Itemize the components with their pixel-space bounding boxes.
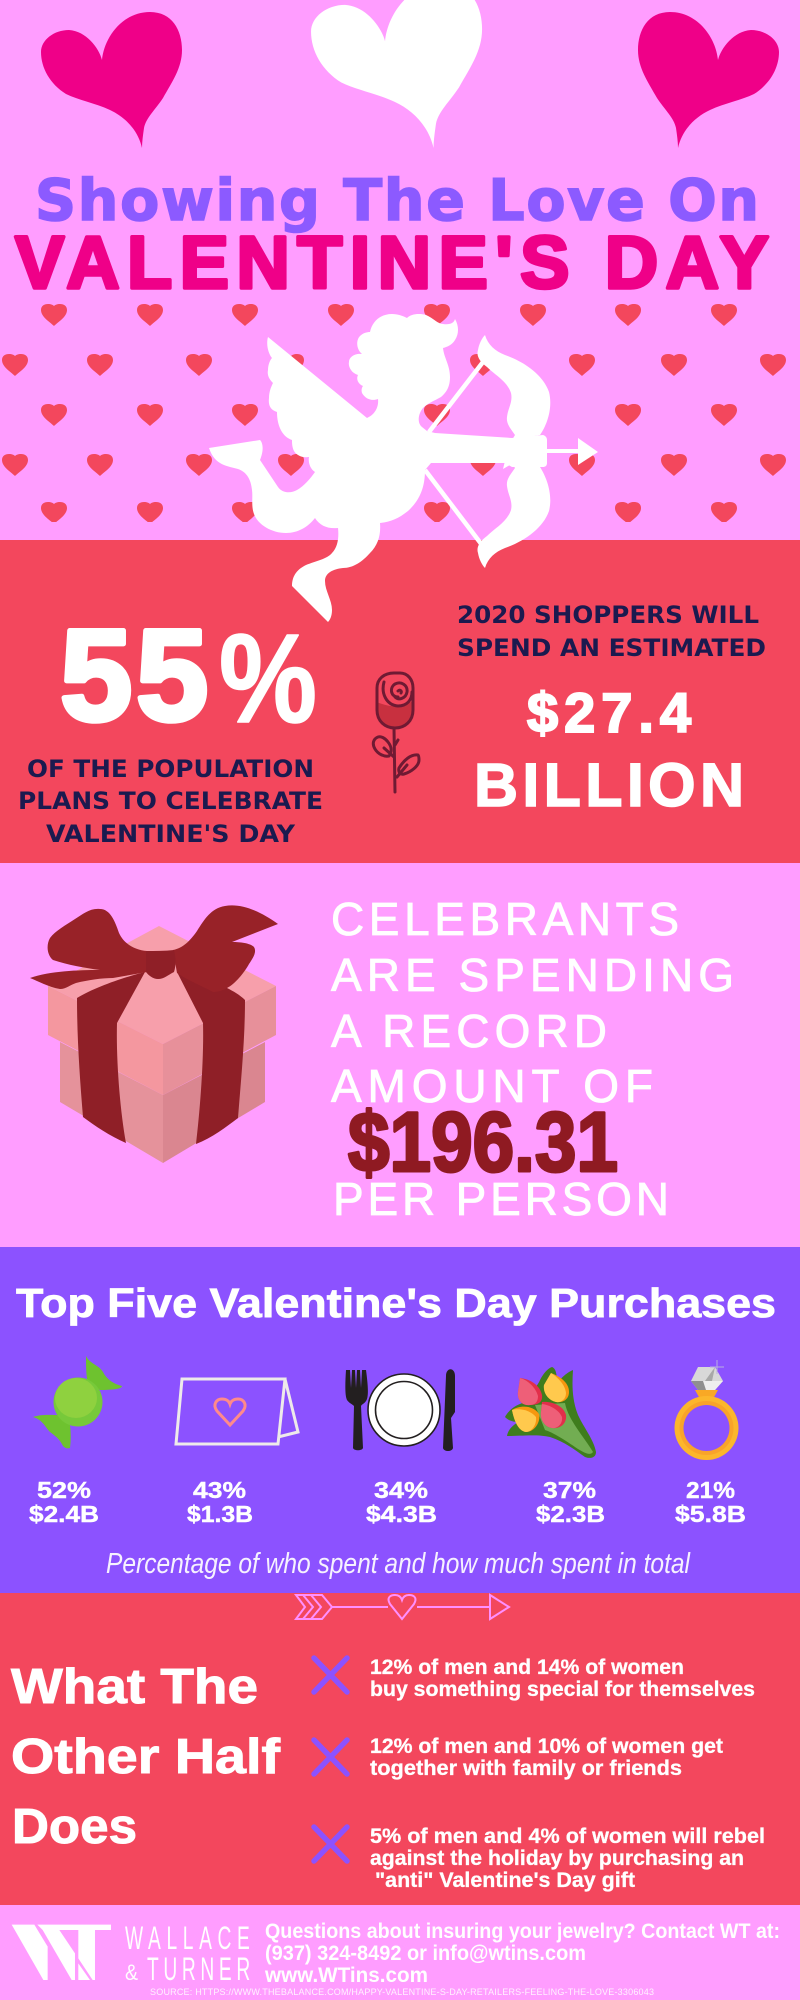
callout: 55 percent: 5 <box>136 602 208 748</box>
text: record spending: AMOUNT OF <box>331 1060 653 1112</box>
icon: pink heart left <box>41 12 182 148</box>
stats: evening out <box>366 1477 437 1527</box>
heading: what the other half does: What The <box>11 1660 258 1714</box>
callout: 55 percent: PLANS TO CELEBRATE <box>18 787 323 815</box>
callout: 55 percent: % <box>219 608 317 749</box>
stats: jewelry <box>675 1477 746 1527</box>
icon: pink heart right <box>638 12 779 148</box>
stats: candy <box>29 1477 99 1527</box>
panel: footer background <box>0 1905 800 2000</box>
icon: x marker three <box>314 1827 347 1861</box>
icon: card <box>176 1379 298 1444</box>
heading: what the other half does: Other Half <box>11 1730 281 1784</box>
callout: 55 percent: OF THE POPULATION <box>27 755 314 783</box>
text: item three: against the holiday by purchasing an <box>370 1847 744 1870</box>
stats: flowers <box>536 1477 605 1527</box>
heart pattern <box>2 304 786 524</box>
text: item one: buy something special for themselves <box>370 1678 755 1701</box>
stats: candy: $2.4B <box>29 1501 99 1527</box>
stats: flowers: $2.3B <box>536 1501 605 1527</box>
source line: SOURCE: HTTPS://WWW.THEBALANCE.COM/HAPPY-VALENTINE-S-DAY-RETAILERS-FEELING-THE-LOVE-3306043 <box>150 1987 654 1997</box>
callout: 27.4 billion: BILLION <box>474 751 744 819</box>
stats: evening out: 34% <box>374 1477 428 1503</box>
panel: other half background <box>0 1593 800 1905</box>
panel: stats background <box>0 540 800 863</box>
text: item three <box>370 1825 765 1892</box>
panel: top five background <box>0 1247 800 1593</box>
text: item three: "anti" Valentine's Day gift <box>375 1869 635 1892</box>
text: record spending: CELEBRANTS <box>331 893 679 945</box>
logo wordmark <box>125 1920 250 1987</box>
icon: heart arrow <box>296 1595 509 1619</box>
callout: 55 percent: VALENTINE'S DAY <box>46 820 296 848</box>
stats: candy: 52% <box>37 1477 91 1503</box>
icon: plate and cutlery <box>345 1369 455 1451</box>
stats: jewelry: 21% <box>686 1477 735 1503</box>
panel: header background <box>0 0 800 540</box>
text: item three: 5% of men and 4% of women will rebel <box>370 1825 765 1848</box>
text: item two <box>370 1735 723 1780</box>
logo wordmark: TURNER <box>147 1951 250 1987</box>
callout: 27.4 billion: $27.4 <box>527 681 691 744</box>
icon: bouquet <box>505 1367 596 1458</box>
logo mark <box>12 1925 111 1980</box>
caption: Percentage of who spent and how much spent in total <box>106 1548 691 1580</box>
icon: x marker one <box>314 1658 347 1692</box>
text: record spending: $196.31 <box>348 1095 618 1189</box>
title: VALENTINE'S DAY <box>15 221 769 304</box>
text: record spending <box>331 893 734 1225</box>
text: record spending: PER PERSON <box>333 1173 669 1225</box>
icon: candy <box>33 1356 122 1448</box>
stats: jewelry: $5.8B <box>675 1501 746 1527</box>
text: item one <box>370 1656 755 1701</box>
contact text: Questions about insuring your jewelry? Contact WT at: <box>265 1920 780 1943</box>
stats: cards: $1.3B <box>187 1501 253 1527</box>
text: record spending: A RECORD <box>331 1005 607 1057</box>
stats: flowers: 37% <box>543 1477 596 1503</box>
stats: cards <box>187 1477 253 1527</box>
icon: x marker two <box>314 1740 347 1774</box>
contact text: www.WTins.com <box>264 1964 428 1987</box>
text: item one: 12% of men and 14% of women <box>370 1656 684 1679</box>
text: record spending: ARE SPENDING <box>331 949 734 1001</box>
icon: rose <box>373 673 419 792</box>
stats: cards: 43% <box>193 1477 246 1503</box>
callout: 55 percent <box>18 602 323 848</box>
title <box>15 168 769 304</box>
heading: what the other half does <box>11 1660 281 1854</box>
callout: 27.4 billion <box>457 601 766 819</box>
title: Showing The Love On <box>35 168 759 234</box>
contact text <box>264 1920 780 1987</box>
callout: 27.4 billion: 2020 SHOPPERS WILL <box>457 601 759 629</box>
icon: white heart center <box>311 0 482 148</box>
icon: diamond ring <box>674 1360 738 1460</box>
panel: spending background <box>0 863 800 1247</box>
logo wordmark: WALLACE <box>125 1920 250 1956</box>
text: item two: 12% of men and 10% of women get <box>370 1735 723 1758</box>
callout: 27.4 billion: SPEND AN ESTIMATED <box>457 634 766 662</box>
callout: 55 percent: 5 <box>60 602 132 748</box>
heading: top five: Top Five Valentine's Day Purchases <box>16 1280 776 1326</box>
icon: cupid silhouette <box>209 314 598 622</box>
logo wordmark: & <box>125 1960 138 1985</box>
text: item two: together with family or friends <box>370 1757 682 1780</box>
heading: what the other half does: Does <box>12 1800 137 1854</box>
stats: evening out: $4.3B <box>366 1501 437 1527</box>
icon: gift box <box>30 905 278 1163</box>
contact text: (937) 324-8492 or info@wtins.com <box>265 1942 586 1965</box>
